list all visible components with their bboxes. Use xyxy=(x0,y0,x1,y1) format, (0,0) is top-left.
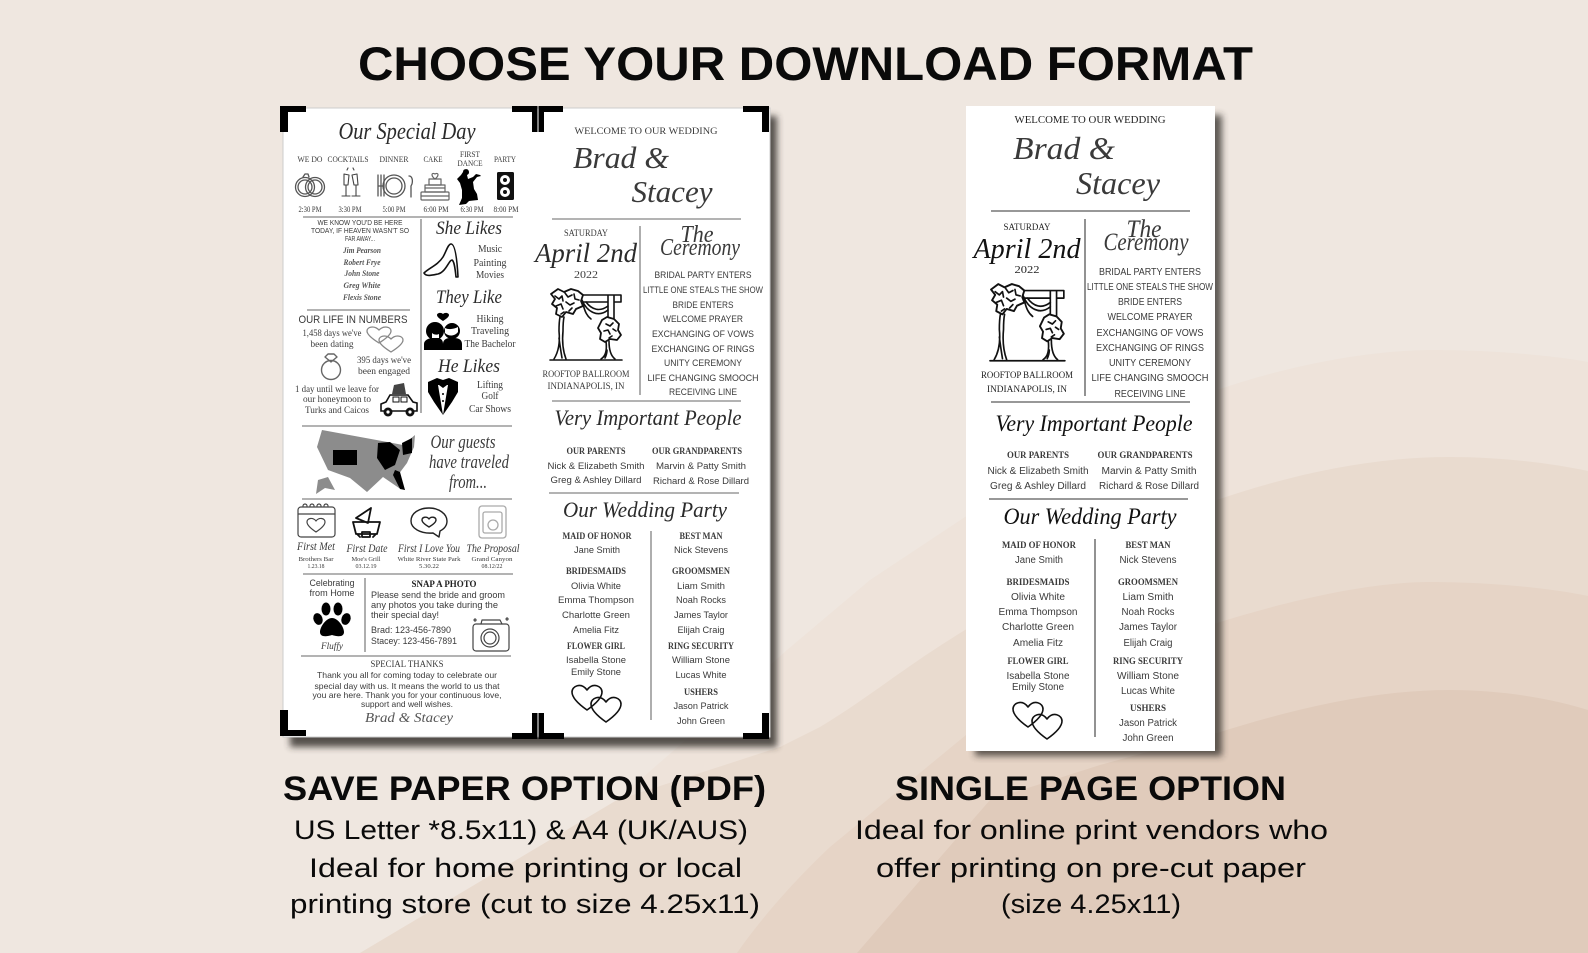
vip names: OUR PARENTS xyxy=(566,446,626,456)
caption: save paper option: SAVE PAPER OPTION (PDF) xyxy=(283,770,766,808)
vip names: Greg & Ashley Dillard xyxy=(990,481,1086,492)
memorial names: Jim Pearson xyxy=(342,246,381,255)
icon: paw xyxy=(312,602,352,636)
guests traveled text: have traveled xyxy=(429,452,509,473)
vip names: Richard & Rose Dillard xyxy=(1099,481,1199,492)
schedule labels: FIRST xyxy=(460,149,481,159)
wedding party left column: Charlotte Green xyxy=(1002,622,1074,633)
heading: our wedding party: Our Wedding Party xyxy=(563,497,727,522)
vip names: Nick & Elizabeth Smith xyxy=(988,466,1088,477)
milestones details: 03.12.19 xyxy=(356,563,376,570)
caption: single page option: SINGLE PAGE OPTION xyxy=(895,770,1286,808)
special thanks body: you are here. Thank you for your continuous love, xyxy=(312,690,502,700)
vip names: Richard & Rose Dillard xyxy=(653,476,749,487)
they like list: Traveling xyxy=(471,325,509,337)
heading: the ceremony xyxy=(1104,216,1189,256)
wedding party right column: Jason Patrick xyxy=(674,701,729,712)
memorial text: FAR AWAY... xyxy=(345,234,375,243)
they like heading: They Like xyxy=(436,288,502,308)
schedule labels xyxy=(298,149,516,168)
program: venue xyxy=(542,369,630,391)
wedding party left column: Isabella Stone xyxy=(1006,671,1070,682)
he likes list: Car Shows xyxy=(469,403,511,415)
they like list: Hiking xyxy=(476,313,504,325)
special thanks body xyxy=(312,670,502,709)
milestones details: 08.12/22 xyxy=(482,563,502,570)
caption: save paper option xyxy=(283,770,766,919)
special thanks heading: SPECIAL THANKS xyxy=(370,660,444,670)
program: date xyxy=(533,228,637,281)
numbers text xyxy=(295,329,411,416)
program: venue: ROOFTOP BALLROOM xyxy=(542,369,630,379)
icon: dinner plate xyxy=(378,175,412,197)
ceremony list xyxy=(1087,267,1213,400)
wedding party right column: Jason Patrick xyxy=(1119,718,1178,729)
vip names xyxy=(988,451,1199,492)
milestones details: Moe's Grill xyxy=(352,556,381,563)
wedding party left column: Jane Smith xyxy=(574,545,620,556)
heading: the ceremony: Ceremony xyxy=(660,235,740,261)
caption: save paper option: Ideal for home printing or local xyxy=(309,853,742,883)
snap a photo body: Brad: 123-456-7890 xyxy=(371,625,451,636)
celebrating from home: from Home xyxy=(310,588,354,598)
memorial text: TODAY, IF HEAVEN WASN'T SO xyxy=(311,226,409,235)
ceremony list: LIFE CHANGING SMOOCH xyxy=(1092,373,1208,384)
vip names: OUR GRANDPARENTS xyxy=(652,446,742,456)
celebrating from home: Celebrating xyxy=(310,578,354,588)
vip names: Marvin & Patty Smith xyxy=(1102,466,1196,477)
heading: our special day: Our Special Day xyxy=(338,119,476,145)
names xyxy=(1013,130,1161,201)
memorial names: Greg White xyxy=(344,281,381,290)
snap a photo body: their special day! xyxy=(371,610,439,621)
caption: single page option: Ideal for online print vendors who xyxy=(855,815,1328,845)
wedding party left column: FLOWER GIRL xyxy=(1008,657,1068,667)
ceremony list: WELCOME PRAYER xyxy=(1108,312,1192,323)
vip names: Nick & Elizabeth Smith xyxy=(548,461,644,472)
vip names: OUR PARENTS xyxy=(1007,451,1069,461)
snap a photo body: Please send the bride and groom xyxy=(371,590,505,601)
program: venue: INDIANAPOLIS, IN xyxy=(548,381,625,391)
schedule times: 8:00 PM xyxy=(494,205,519,214)
wedding party right column: Noah Rocks xyxy=(676,595,726,606)
she likes list xyxy=(474,243,507,281)
vip names xyxy=(548,446,749,487)
schedule labels: DINNER xyxy=(380,154,409,164)
heading: our wedding party: Our Wedding Party xyxy=(1004,504,1177,529)
wedding party right column: Lucas White xyxy=(1121,686,1175,697)
schedule times: 3:30 PM xyxy=(338,205,362,214)
wedding party left column: MAID OF HONOR xyxy=(1002,541,1076,551)
milestones captions xyxy=(296,541,520,555)
milestones details: Brothers Bar xyxy=(298,556,334,563)
icon: camera xyxy=(473,618,509,651)
schedule times: 5:00 PM xyxy=(382,205,406,214)
wedding party right column: Elijah Craig xyxy=(678,625,724,636)
schedule labels: COCKTAILS xyxy=(328,154,369,164)
wedding party left column: FLOWER GIRL xyxy=(567,641,625,651)
milestones details: 1.23.18 xyxy=(308,563,324,570)
wedding party right column xyxy=(668,531,734,727)
heading: very important people: Very Important People xyxy=(996,411,1192,436)
venue: INDIANAPOLIS, IN xyxy=(987,385,1067,395)
special thanks body: support and well wishes. xyxy=(361,699,453,709)
wedding party right column: GROOMSMEN xyxy=(1118,578,1178,588)
wedding party right column: Nick Stevens xyxy=(1120,555,1176,566)
signature: Brad & Stacey xyxy=(365,711,454,726)
ceremony list: EXCHANGING OF RINGS xyxy=(1096,343,1204,354)
special thanks body: Thank you all for coming today to celebrate our xyxy=(317,670,497,680)
wedding party right column: Lucas White xyxy=(676,670,726,681)
milestones details: Grand Canyon xyxy=(472,556,512,563)
memorial names: Flexis Stone xyxy=(342,293,381,302)
numbers text: 395 days we've xyxy=(357,356,411,366)
special thanks body: special day with us. It means the world to us that xyxy=(314,681,500,691)
icon: wedding arch xyxy=(990,284,1065,361)
she likes list: Movies xyxy=(476,269,504,281)
vip names: OUR GRANDPARENTS xyxy=(1098,451,1192,461)
schedule labels: CAKE xyxy=(424,154,442,164)
schedule times xyxy=(298,205,519,214)
heading: very important people: Very Important People xyxy=(554,405,742,430)
ceremony list: EXCHANGING OF VOWS xyxy=(1096,328,1204,339)
wedding party right column: John Green xyxy=(677,716,725,727)
icon: engagement ring xyxy=(322,354,340,380)
wedding party left column: Charlotte Green xyxy=(562,610,630,621)
fluffy name: Fluffy xyxy=(320,641,344,652)
wedding party right column: USHERS xyxy=(684,687,718,697)
wedding party right column: Liam Smith xyxy=(1122,592,1174,603)
numbers text: our honeymoon to xyxy=(303,395,371,405)
date: April 2nd xyxy=(971,234,1082,265)
crop marks xyxy=(280,106,769,739)
snap a photo body: Stacey: 123-456-7891 xyxy=(371,636,457,647)
she likes list: Music xyxy=(478,243,502,255)
ceremony list: BRIDAL PARTY ENTERS xyxy=(654,270,752,281)
program: date: SATURDAY xyxy=(564,228,608,238)
schedule times: 2:30 PM xyxy=(298,205,322,214)
icon: honeymoon car xyxy=(381,383,417,416)
heading: the ceremony: The xyxy=(1126,216,1162,243)
icon: dancers xyxy=(457,169,481,205)
date: SATURDAY xyxy=(1004,223,1051,233)
ceremony list: BRIDE ENTERS xyxy=(672,300,734,311)
program: names: Brad & xyxy=(573,140,669,175)
caption: save paper option: US Letter *8.5x11) & A4 (UK/AUS) xyxy=(294,815,748,845)
heading: our life in numbers: OUR LIFE IN NUMBERS xyxy=(298,314,408,326)
ceremony list: LITTLE ONE STEALS THE SHOW xyxy=(1087,282,1213,293)
schedule times: 6:00 PM xyxy=(424,205,449,214)
wedding party left column xyxy=(998,541,1078,693)
wedding party right column: Liam Smith xyxy=(677,581,725,592)
memorial names: John Stone xyxy=(344,269,380,278)
numbers text: 1,458 days we've xyxy=(302,329,362,339)
program: names: Stacey xyxy=(632,174,713,209)
wedding party right column: USHERS xyxy=(1130,704,1166,714)
vip names: Greg & Ashley Dillard xyxy=(550,475,642,486)
ceremony list: WELCOME PRAYER xyxy=(663,314,743,325)
ceremony list: BRIDE ENTERS xyxy=(1118,297,1182,308)
caption: save paper option: printing store (cut to size 4.25x11) xyxy=(290,889,760,919)
wedding party left column: Amelia Fitz xyxy=(573,625,619,636)
icon: picnic xyxy=(353,508,380,537)
snap a photo body xyxy=(371,590,505,647)
wedding party left column: Amelia Fitz xyxy=(1013,638,1063,649)
wedding party left column: Emily Stone xyxy=(571,667,621,678)
they like list: The Bachelor xyxy=(464,338,516,350)
heading: the ceremony: Ceremony xyxy=(1104,229,1189,256)
icon: couple xyxy=(424,313,462,350)
names: Stacey xyxy=(1076,165,1161,201)
milestones captions: First Met xyxy=(296,541,336,553)
program: date: 2022 xyxy=(574,270,598,281)
milestones captions: The Proposal xyxy=(466,543,520,555)
schedule labels: PARTY xyxy=(494,154,516,164)
wedding party right column: RING SECURITY xyxy=(668,641,734,651)
celebrating from home xyxy=(310,578,354,598)
icon: outline hearts xyxy=(367,327,403,352)
she likes list: Painting xyxy=(474,257,507,269)
icon: cake xyxy=(421,173,449,200)
milestones details: White River State Park xyxy=(398,556,461,563)
icon: calendar xyxy=(298,504,335,537)
wedding party left column: Emma Thompson xyxy=(998,607,1078,618)
venue: ROOFTOP BALLROOM xyxy=(981,371,1074,381)
date xyxy=(971,223,1082,276)
numbers text: been dating xyxy=(310,340,354,350)
caption: single page option xyxy=(855,770,1328,919)
snap a photo heading: SNAP A PHOTO xyxy=(412,580,476,590)
names: Brad & xyxy=(1013,130,1115,166)
icon: champagne flutes xyxy=(342,168,360,196)
icon: wedding arch xyxy=(550,289,622,360)
vip names: Marvin & Patty Smith xyxy=(656,461,746,472)
milestones details: 5.30.22 xyxy=(419,563,439,570)
ceremony list: RECEIVING LINE xyxy=(1114,389,1186,400)
memorial names xyxy=(342,246,381,302)
milestones captions: First Date xyxy=(346,543,388,555)
heading: the ceremony xyxy=(660,222,740,261)
program: welcome: WELCOME TO OUR WEDDING xyxy=(574,126,718,137)
wedding party right column: William Stone xyxy=(672,655,730,666)
he likes heading: He Likes xyxy=(437,357,500,377)
wedding party left column: Olivia White xyxy=(1011,592,1065,603)
wedding party left column: Jane Smith xyxy=(1015,555,1063,566)
ceremony list: LITTLE ONE STEALS THE SHOW xyxy=(643,285,764,296)
icon: linked hearts xyxy=(572,686,621,722)
caption: single page option: offer printing on pre-cut paper xyxy=(876,853,1306,883)
milestones details xyxy=(298,556,512,570)
panel: save paper sheet xyxy=(280,106,777,747)
wedding party right column: Nick Stevens xyxy=(674,545,728,556)
wedding party right column: Elijah Craig xyxy=(1124,638,1172,649)
wedding party right column: BEST MAN xyxy=(1126,541,1171,551)
guests traveled text xyxy=(429,432,509,493)
wedding party left column: Emily Stone xyxy=(1012,682,1064,693)
wedding party left column: MAID OF HONOR xyxy=(562,531,632,541)
icon: linked hearts xyxy=(1013,703,1062,739)
program: date: April 2nd xyxy=(533,238,637,268)
memorial names: Robert Frye xyxy=(343,258,381,267)
they like list xyxy=(464,313,516,350)
she likes heading: She Likes xyxy=(436,219,502,239)
snap a photo body: any photos you take during the xyxy=(371,600,498,611)
wedding party left column: Olivia White xyxy=(571,581,621,592)
guests traveled text: from... xyxy=(449,472,487,493)
welcome: WELCOME TO OUR WEDDING xyxy=(1014,115,1166,126)
caption: single page option: (size 4.25x11) xyxy=(1001,889,1181,919)
icon: proposal ring box xyxy=(479,506,506,538)
schedule labels: WE DO xyxy=(298,154,322,164)
milestones captions: First I Love You xyxy=(397,543,460,555)
schedule labels: DANCE xyxy=(458,158,482,168)
ceremony list: UNITY CEREMONY xyxy=(664,358,743,369)
icon: rings xyxy=(296,174,324,196)
ceremony list: RECEIVING LINE xyxy=(669,387,737,398)
wedding party right column: Noah Rocks xyxy=(1122,607,1174,618)
ceremony list: UNITY CEREMONY xyxy=(1109,358,1191,369)
wedding party right column: William Stone xyxy=(1117,671,1179,682)
memorial text: WE KNOW YOU'D BE HERE xyxy=(318,218,402,227)
icon: high heel xyxy=(424,244,458,277)
ceremony list: EXCHANGING OF VOWS xyxy=(652,329,754,340)
wedding party left column xyxy=(558,531,634,678)
he likes list: Golf xyxy=(482,390,499,402)
wedding party left column: Isabella Stone xyxy=(566,655,626,666)
numbers text: been engaged xyxy=(358,367,410,377)
schedule times: 6:30 PM xyxy=(460,205,484,214)
venue xyxy=(981,371,1074,395)
icon: us map xyxy=(316,430,415,494)
wedding party left column: Emma Thompson xyxy=(558,595,634,606)
numbers text: Turks and Caicos xyxy=(305,406,369,416)
wedding party right column: James Taylor xyxy=(1119,622,1178,633)
wedding party left column: BRIDESMAIDS xyxy=(1006,578,1070,588)
wedding party right column: James Taylor xyxy=(674,610,729,621)
heading: the ceremony: The xyxy=(680,222,714,248)
numbers text: 1 day until we leave for xyxy=(295,384,380,395)
guests traveled text: Our guests xyxy=(430,432,496,453)
wedding party right column: GROOMSMEN xyxy=(672,566,730,576)
panel: single page sheet xyxy=(966,106,1222,756)
he likes list xyxy=(469,379,511,415)
icon: speech bubble xyxy=(411,508,447,537)
wedding party right column xyxy=(1113,541,1183,744)
memorial text xyxy=(311,218,409,243)
icon: speaker xyxy=(497,172,514,200)
icon: tuxedo xyxy=(428,378,458,415)
ceremony list xyxy=(643,270,764,398)
wedding party right column: BEST MAN xyxy=(680,531,723,541)
he likes list: Lifting xyxy=(477,379,503,391)
wedding party right column: RING SECURITY xyxy=(1113,657,1183,667)
wedding party left column: BRIDESMAIDS xyxy=(566,566,626,576)
date: 2022 xyxy=(1014,265,1040,276)
title: CHOOSE YOUR DOWNLOAD FORMAT xyxy=(358,37,1253,90)
ceremony list: LIFE CHANGING SMOOCH xyxy=(648,373,759,384)
ceremony list: BRIDAL PARTY ENTERS xyxy=(1099,267,1201,278)
program: names xyxy=(573,140,713,209)
ceremony list: EXCHANGING OF RINGS xyxy=(652,344,754,355)
wedding party right column: John Green xyxy=(1122,733,1174,744)
